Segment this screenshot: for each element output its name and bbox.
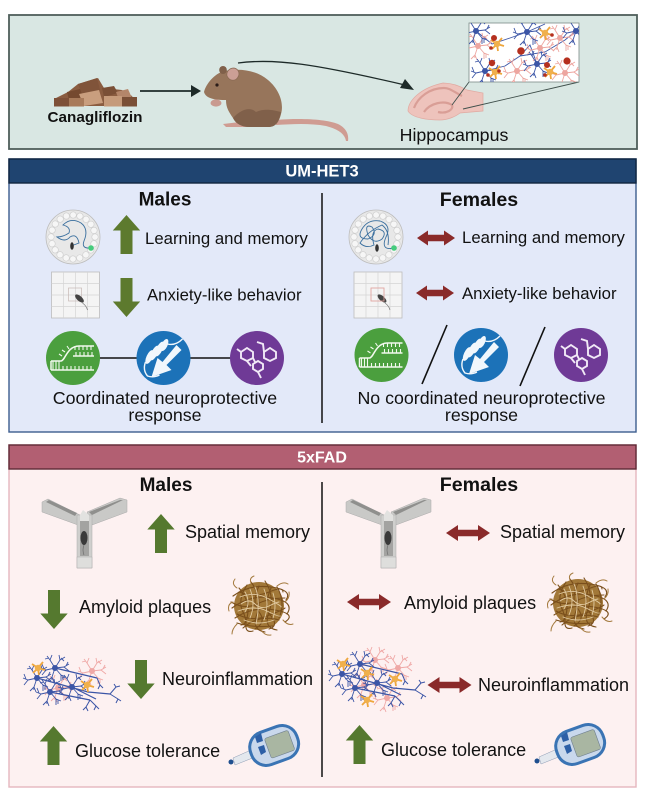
label: no coordinated response: No coordinated neuroprotective [357,388,606,408]
label: Glucose tolerance: Glucose tolerance [75,741,220,761]
icon: hippocampus [408,83,483,120]
heading: UM-HET3: UM-HET3 [285,162,359,180]
label: Neuroinflammation: Neuroinflammation [162,669,313,689]
icon: mouse [204,66,348,141]
label: coordinated response: Coordinated neuroprotective [53,388,277,408]
heading: 5xFAD [9,445,636,469]
icon: open field females [354,272,402,318]
arrow: neuroinflammation unchanged [428,677,472,693]
pathway: coordinated omics [46,331,284,385]
arrow: drug to mouse [140,85,201,97]
column: 5xFAD females [328,474,629,771]
heading: 5xFAD: 5xFAD [297,450,347,466]
arrow: spatial memory up [147,514,175,553]
label: Learning and memory: Learning and memory [145,229,309,248]
column: UM-HET3 females [349,189,626,425]
arrow: anxiety down [113,278,140,317]
arrow: amyloid down [40,590,68,629]
icon: canagliflozin pile [54,78,137,106]
label: Canagliflozin: Canagliflozin [48,109,142,126]
arrow: amyloid unchanged [347,594,391,610]
arrow: glucose up [346,725,373,764]
label: Anxiety-like behavior: Anxiety-like behavior [462,284,617,303]
icon: amyloid tangle females [548,573,612,632]
arrow: anxiety unchanged [416,286,454,300]
label: Glucose tolerance: Glucose tolerance [381,740,526,760]
icon: glucose meter females [534,718,611,771]
panel: 5xFAD [9,445,636,787]
label: Neuroinflammation: Neuroinflammation [478,675,629,695]
icon: neurons females [328,647,426,712]
label: Hippocampus: Hippocampus [400,125,508,145]
callout: neural tissue inset [452,22,580,110]
icon: Y maze females [346,498,431,568]
column: UM-HET3 males [46,190,309,425]
heading: Females: Females [440,474,518,496]
heading: UM-HET3 [9,159,636,183]
label: coordinated response [53,388,277,425]
icon: open field males [52,272,100,318]
heading: Males: Males [140,475,192,496]
label: Anxiety-like behavior: Anxiety-like behavior [147,286,302,304]
icon: glucose meter males [228,719,305,772]
arrow: learning up [113,215,140,254]
label: no coordinated response [357,388,606,425]
pathway: uncoordinated omics [354,325,608,386]
label: Learning and memory: Learning and memory [462,228,626,247]
arrow: learning unchanged [417,230,455,246]
label: Spatial memory: Spatial memory [185,522,310,542]
arrow: spatial memory unchanged [446,525,490,541]
heading: Females: Females [440,189,518,211]
label: coordinated response: response [128,405,202,425]
icon: amyloid tangle males [228,576,293,635]
label: no coordinated response: response [445,405,518,425]
label: Amyloid plaques: Amyloid plaques [79,597,211,617]
arrow: neuroinflammation down [127,660,155,699]
icon: water maze females [349,210,403,264]
arrow: glucose up [40,726,67,765]
icon: neurons males [23,655,121,711]
icon: water maze males [46,210,100,264]
label: Spatial memory: Spatial memory [500,522,625,542]
heading: Males: Males [139,190,191,210]
panel: canagliflozin overview [9,15,637,149]
label: Amyloid plaques: Amyloid plaques [404,593,536,613]
panel: UM-HET3 [9,159,636,432]
column: 5xFAD males [23,475,313,772]
arrow: mouse to hippocampus [238,61,414,90]
icon: Y maze males [42,498,127,568]
